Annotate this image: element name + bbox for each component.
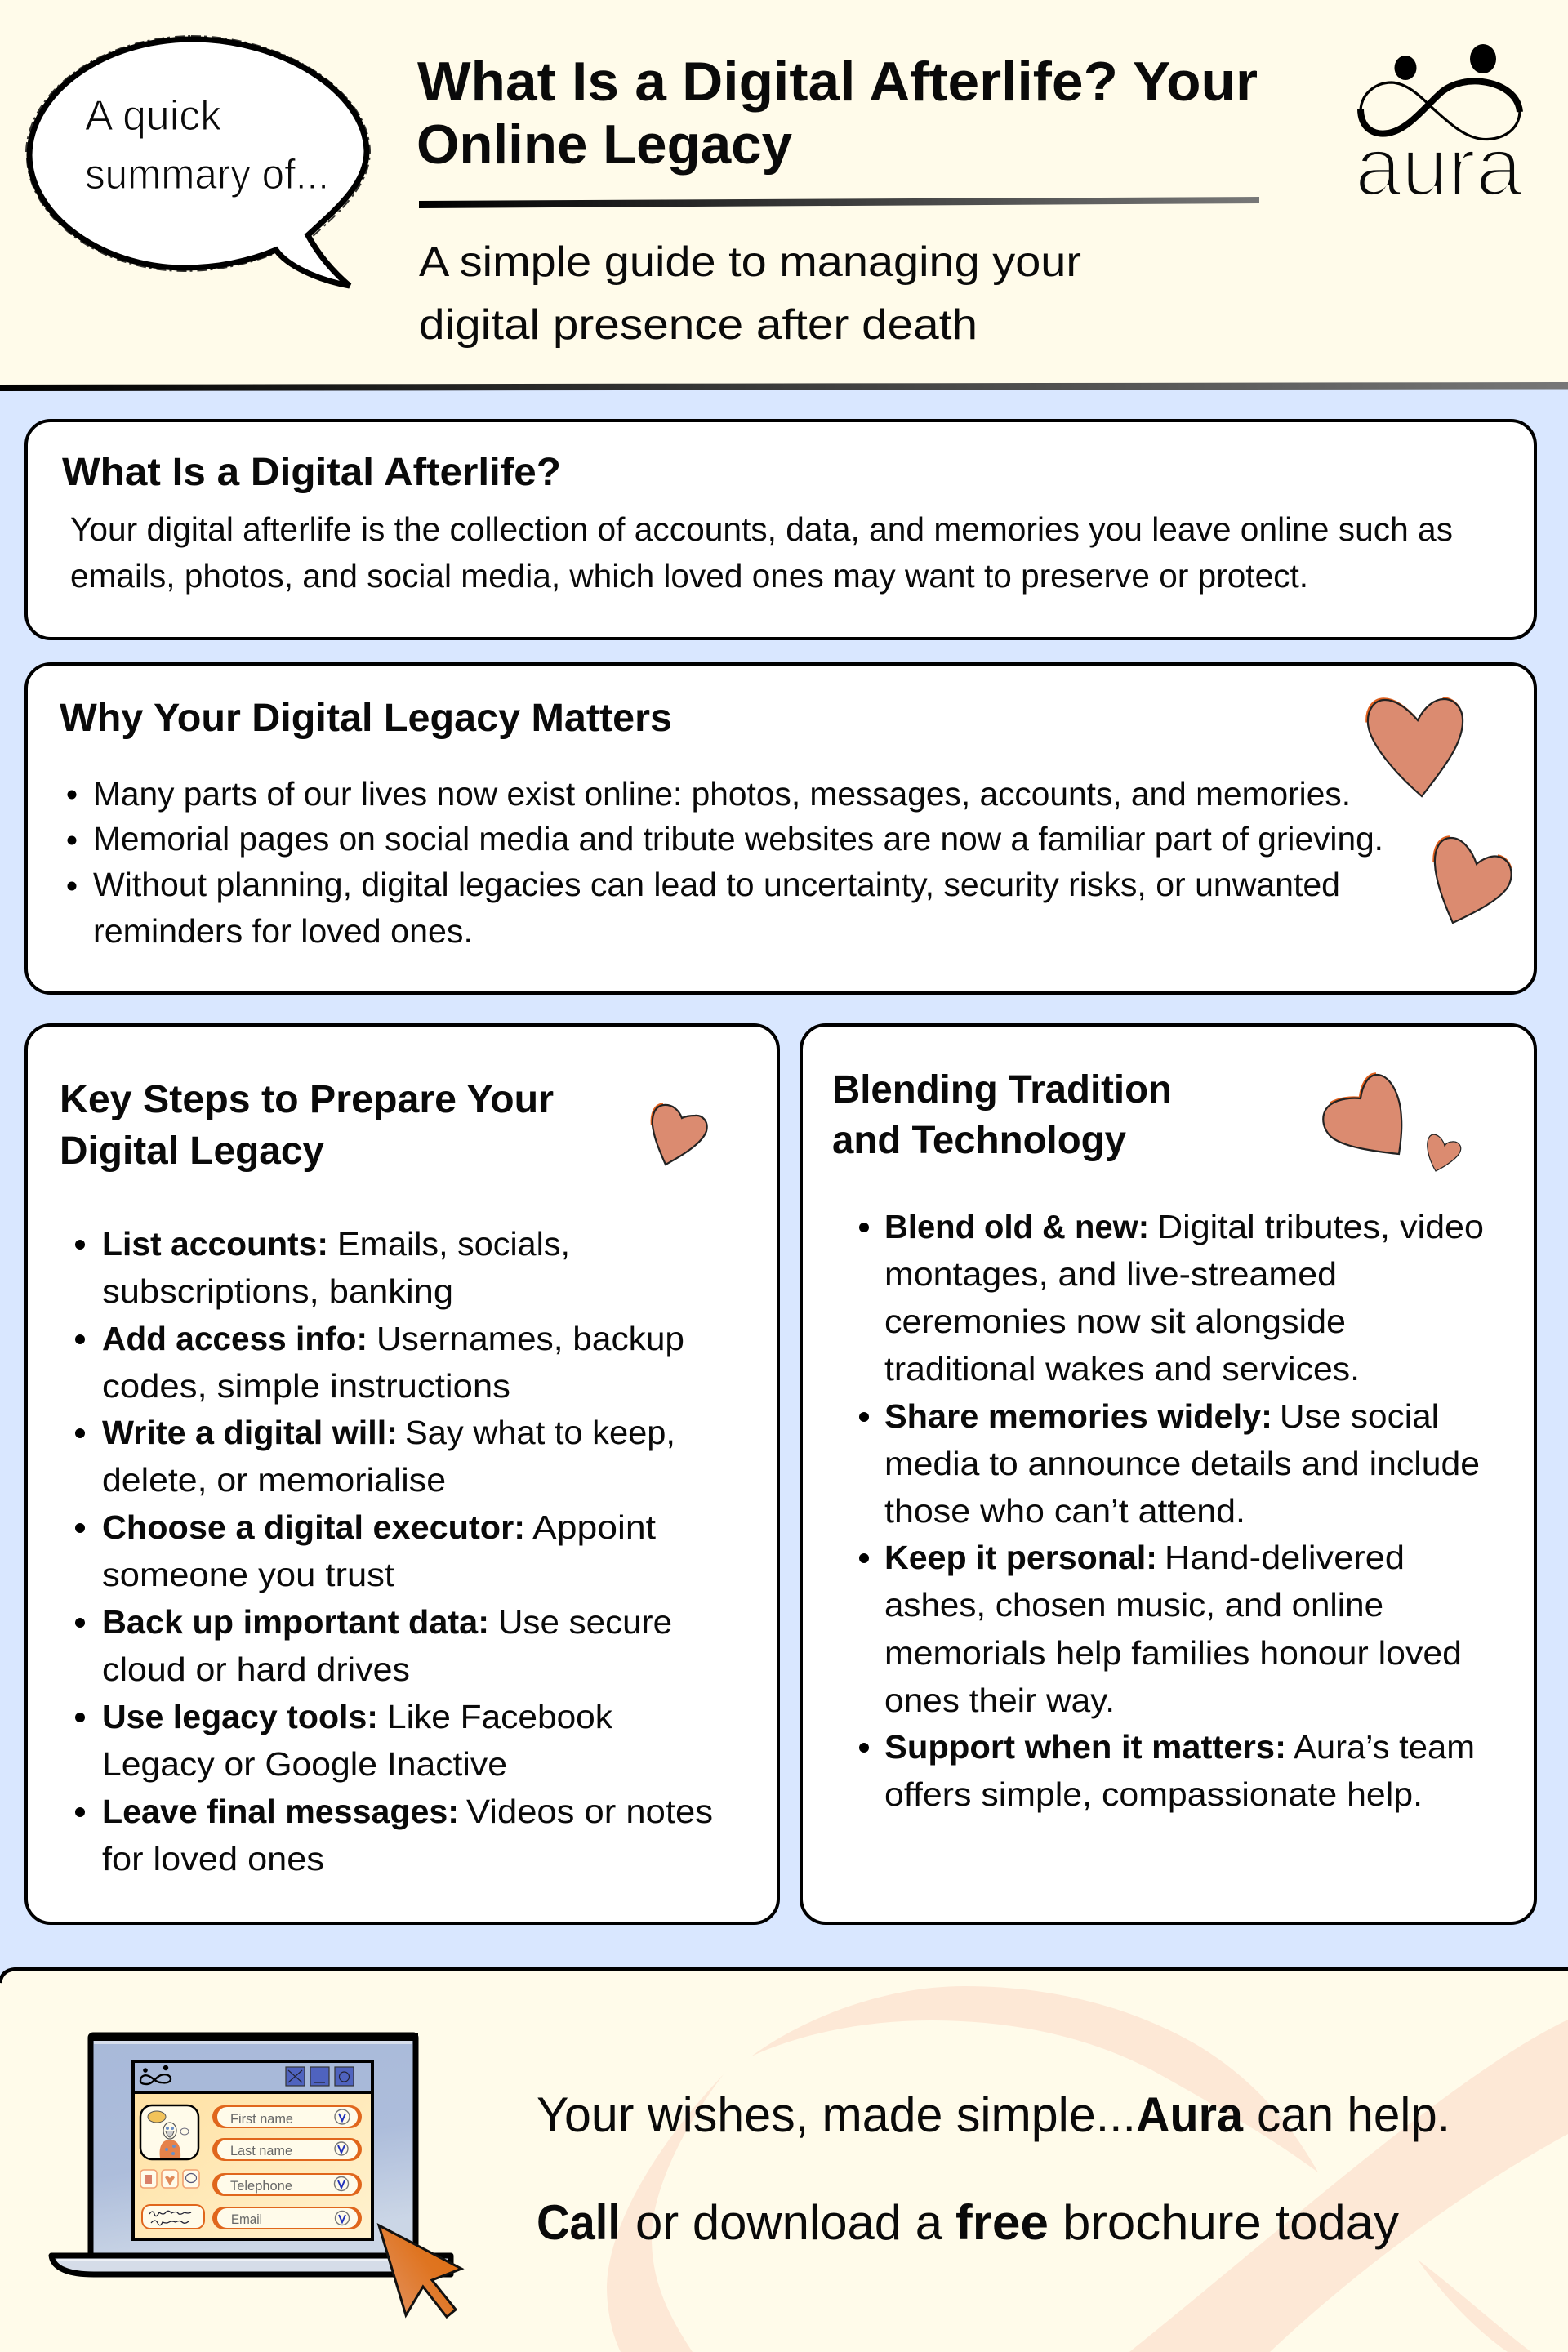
bullet list: Many parts of our lives now exist online: photos, messages, accounts, and memories. xyxy=(93,775,1351,813)
background infinity swoosh xyxy=(607,1986,1568,2352)
form fields: First name xyxy=(230,2111,293,2127)
list: blending tradition: memorials help families honour loved xyxy=(884,1634,1462,1672)
panel: footer xyxy=(0,1969,1568,2352)
title: Online Legacy xyxy=(416,114,792,176)
speech bubble: a quick summary of: summary of... xyxy=(85,151,329,198)
list: blending tradition: ashes, chosen music, and online xyxy=(884,1586,1383,1624)
list: blending tradition: Keep it personal: xyxy=(884,1539,1157,1576)
form fields: Telephone xyxy=(230,2178,292,2194)
list: key steps: cloud or hard drives xyxy=(102,1650,410,1688)
call to action: free xyxy=(956,2195,1049,2250)
list: blending tradition: traditional wakes and services. xyxy=(884,1350,1360,1388)
speech bubble: a quick summary of: A quick xyxy=(85,92,222,140)
body text: Your digital afterlife is the collection of accounts, data, and memories you leave online such as xyxy=(70,510,1453,548)
call to action: Call xyxy=(537,2195,621,2250)
bullet list: reminders for loved ones. xyxy=(93,912,473,950)
list: key steps: List accounts: xyxy=(102,1225,328,1263)
list: key steps: for loved ones xyxy=(102,1840,324,1878)
bullet list: Without planning, digital legacies can lead to uncertainty, security risks, or unwanted xyxy=(93,866,1340,903)
list: key steps: Say what to keep, xyxy=(405,1414,675,1451)
list: key steps: Like Facebook xyxy=(387,1698,613,1735)
heading: Blending Tradition xyxy=(832,1068,1172,1111)
call to action: can help. xyxy=(1257,2087,1450,2142)
laptop screen xyxy=(91,2033,418,2260)
form fields: Last name xyxy=(230,2143,292,2158)
list: key steps: Write a digital will: xyxy=(102,1414,398,1451)
list: blending tradition: ceremonies now sit alongside xyxy=(884,1303,1346,1340)
list: key steps xyxy=(75,1225,713,1878)
list: key steps: codes, simple instructions xyxy=(102,1367,510,1405)
icon: tiny heart xyxy=(1428,1134,1461,1171)
list: key steps: Usernames, backup xyxy=(376,1320,684,1357)
heading: Key Steps to Prepare Your xyxy=(60,1078,554,1121)
logo: aura: aura xyxy=(1355,120,1522,213)
heading: What Is a Digital Afterlife? xyxy=(62,451,561,494)
panel: blending tradition and technology xyxy=(801,1025,1535,1923)
small icon tiles xyxy=(140,2170,199,2188)
heading xyxy=(832,1068,1172,1162)
list: blending tradition: Share memories widely: xyxy=(884,1397,1272,1435)
list: blending tradition xyxy=(859,1208,1484,1813)
list: key steps: Back up important data: xyxy=(102,1603,489,1641)
call to action: Aura xyxy=(1136,2087,1244,2142)
list: key steps: Use secure xyxy=(498,1603,672,1641)
subtitle: A simple guide to managing your xyxy=(419,238,1081,286)
list: blending tradition: media to announce details and include xyxy=(884,1445,1480,1482)
list: blending tradition: Support when it matters: xyxy=(884,1728,1286,1766)
heading: Digital Legacy xyxy=(60,1129,324,1173)
form fields xyxy=(212,2105,362,2230)
list: blending tradition: Digital tributes, video xyxy=(1157,1208,1484,1245)
list: blending tradition: Aura’s team xyxy=(1294,1728,1475,1766)
subtitle xyxy=(419,238,1081,349)
list: blending tradition: Hand-delivered xyxy=(1165,1539,1405,1576)
title xyxy=(416,51,1258,176)
illustration: laptop with form xyxy=(51,2033,461,2317)
list: key steps: Leave final messages: xyxy=(102,1793,459,1830)
call to action: brochure today xyxy=(1062,2195,1399,2250)
call to action: Your wishes, made simple... xyxy=(537,2087,1136,2142)
list: blending tradition: Use social xyxy=(1280,1397,1439,1435)
list: key steps: delete, or memorialise xyxy=(102,1461,446,1499)
list: key steps: Use legacy tools: xyxy=(102,1698,378,1735)
window buttons xyxy=(286,2067,354,2086)
icon: small heart xyxy=(1433,836,1512,923)
icon: large heart xyxy=(1323,1073,1401,1154)
logo: aura xyxy=(1355,44,1522,213)
portrait tile xyxy=(140,2105,198,2159)
list: key steps: Choose a digital executor: xyxy=(102,1508,525,1546)
laptop base xyxy=(51,2256,451,2274)
heading: and Technology xyxy=(832,1119,1126,1162)
heading: Why Your Digital Legacy Matters xyxy=(60,697,672,740)
signature tile xyxy=(142,2205,204,2229)
list: blending tradition: Blend old & new: xyxy=(884,1208,1149,1245)
panel: what is a digital afterlife xyxy=(26,421,1535,639)
panel: key steps to prepare your digital legacy xyxy=(26,1025,778,1923)
list: key steps: Emails, socials, xyxy=(337,1225,570,1263)
subtitle: digital presence after death xyxy=(419,301,978,349)
list: key steps: subscriptions, banking xyxy=(102,1272,453,1310)
list: blending tradition: montages, and live-streamed xyxy=(884,1255,1337,1293)
list: blending tradition: ones their way. xyxy=(884,1682,1115,1719)
window logo xyxy=(140,2065,171,2084)
header band xyxy=(0,0,1568,391)
title divider xyxy=(419,197,1259,208)
bullet list xyxy=(67,775,1383,950)
call to action: or download a xyxy=(635,2195,943,2250)
list: key steps: Videos or notes xyxy=(466,1793,713,1830)
body text xyxy=(70,510,1453,595)
title: What Is a Digital Afterlife? Your xyxy=(417,51,1258,113)
icon: heart xyxy=(652,1104,707,1165)
list: key steps: someone you trust xyxy=(102,1556,395,1593)
list: key steps: Legacy or Google Inactive xyxy=(102,1745,507,1783)
panel: why your digital legacy matters xyxy=(26,664,1535,993)
list: blending tradition: those who can’t attend. xyxy=(884,1492,1245,1530)
icon: large heart xyxy=(1366,697,1463,796)
body text: emails, photos, and social media, which loved ones may want to preserve or protect. xyxy=(70,557,1308,595)
list: blending tradition: offers simple, compassionate help. xyxy=(884,1775,1423,1813)
heading xyxy=(60,1078,554,1173)
speech bubble: a quick summary of xyxy=(26,36,370,286)
form fields: Email xyxy=(231,2212,262,2227)
call to action xyxy=(537,2087,1450,2250)
bullet list: Memorial pages on social media and tribute websites are now a familiar part of grieving. xyxy=(93,820,1383,858)
list: key steps: Appoint xyxy=(532,1508,657,1546)
list: key steps: Add access info: xyxy=(102,1320,368,1357)
cursor arrow xyxy=(379,2225,461,2317)
application window xyxy=(133,2061,372,2239)
